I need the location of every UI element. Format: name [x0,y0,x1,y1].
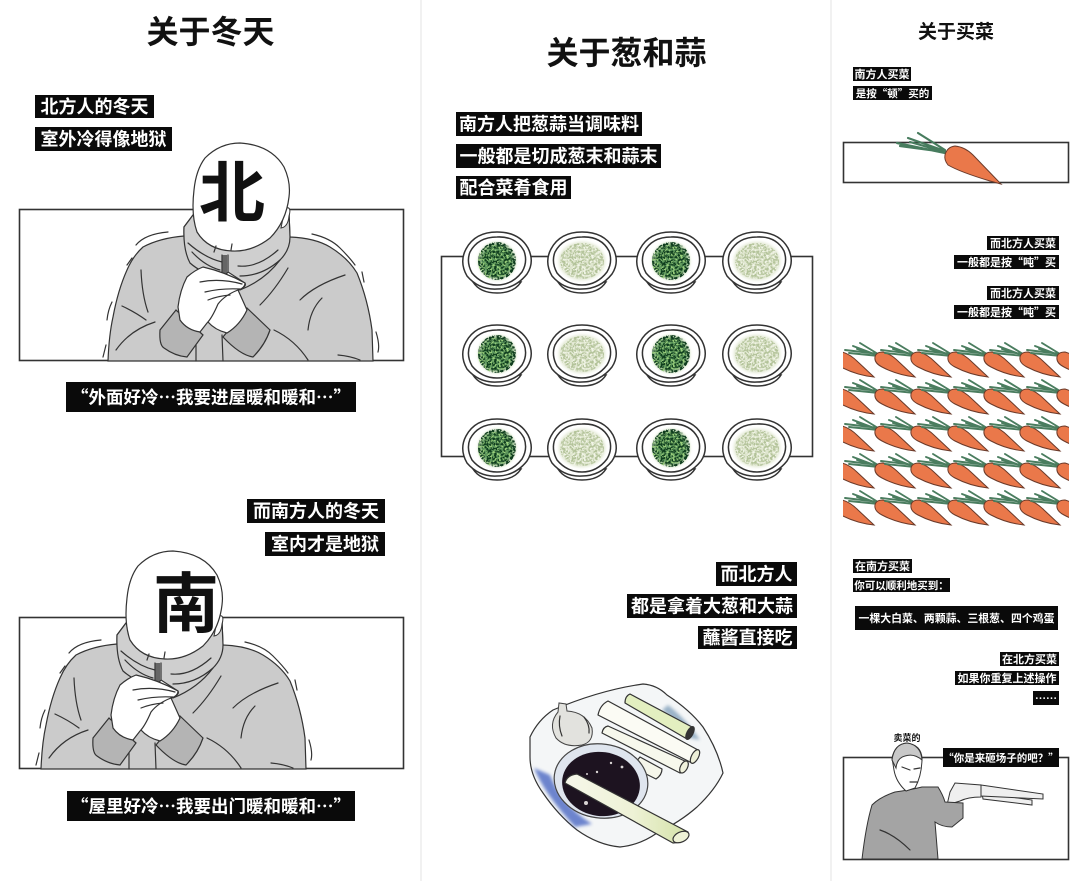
comic frame: single carrot [844,142,1068,182]
label: with dishes: 配合菜肴食用 [460,177,568,198]
comic frame: north [20,210,404,360]
label: in the north: 在北方买菜 [1002,652,1057,666]
label: per ton 2: 一般都是按“吨”买 [957,304,1056,320]
panel: scallion and garlic [442,35,812,847]
panel: buying vegetables [842,22,1070,860]
label: in the south: 在南方买菜 [855,559,910,573]
label: ellipsis: …… [1035,690,1057,706]
heading: scallion and garlic: 关于葱和蒜 [546,35,707,71]
label: outdoors is hell: 室外冷得像地狱 [40,128,166,150]
comic frame: vendor [844,758,1068,860]
character on head: south: 南 [153,567,219,641]
panel: about winter [20,14,404,821]
label: shopping list: 一棵大白菜、两颗蒜、三根葱、四个鸡蛋 [858,610,1055,626]
label: northerners buy 2: 而北方人买菜 [990,286,1056,300]
quote: north: “外面好冷…我要进屋暖和暖和…” [71,384,351,410]
illustration: northern person [103,143,379,361]
quote: south: “屋里好冷…我要出门暖和暖和…” [71,794,351,818]
comic frame: south [20,618,404,768]
illustration: plate of scallion, garlic and sauce [530,684,723,847]
heading: buying vegetables: 关于买菜 [918,21,994,43]
illustration: vendor with shotgun [862,743,1043,859]
illustration: southern person [36,551,312,769]
shotgun [947,783,1043,805]
garlic [552,703,592,746]
bowl grid [463,232,791,480]
scallion stalks [598,694,702,779]
illustration: carrot pattern [843,342,1069,526]
label: southerners buy: 南方人买菜 [854,67,910,81]
label: indoors is hell: 室内才是地狱 [271,534,379,554]
plate [530,684,723,847]
illustration: single carrot [897,133,1001,184]
label: you can buy: 你可以顺利地买到： [854,578,949,593]
label: northerners: 而北方人 [720,564,792,584]
label: whole scallion: 都是拿着大葱和大蒜 [631,596,793,616]
label: seasoning: 南方人把葱蒜当调味料 [459,114,639,134]
heading: about winter: 关于冬天 [146,14,275,50]
label: shopping list [855,606,1058,630]
vendor caption: 卖菜的 [893,732,921,743]
sauce [558,747,644,821]
label: chopped: 一般都是切成葱末和蒜末 [460,146,658,166]
label: dip in sauce: 蘸酱直接吃 [702,627,792,648]
front scallion [565,774,691,845]
character on head: north: 北 [199,156,265,230]
label: if you repeat: 如果你重复上述操作 [958,671,1056,685]
dipping bowl [549,738,653,824]
label: per meal: 是按“顿”买的 [856,86,929,101]
label: southern winter: 而南方人的冬天 [253,500,379,522]
label: northerners buy 1: 而北方人买菜 [990,236,1056,250]
speech label: “你是来砸场子的吧？” [943,750,1059,766]
label: per ton 1: 一般都是按“吨”买 [957,254,1056,270]
comic frame: bowls [442,256,812,456]
label: northern winter: 北方人的冬天 [40,96,148,117]
vendor body [862,787,963,859]
panel separators [420,0,832,881]
plate blue pattern [534,768,592,827]
vendor head [892,743,922,791]
